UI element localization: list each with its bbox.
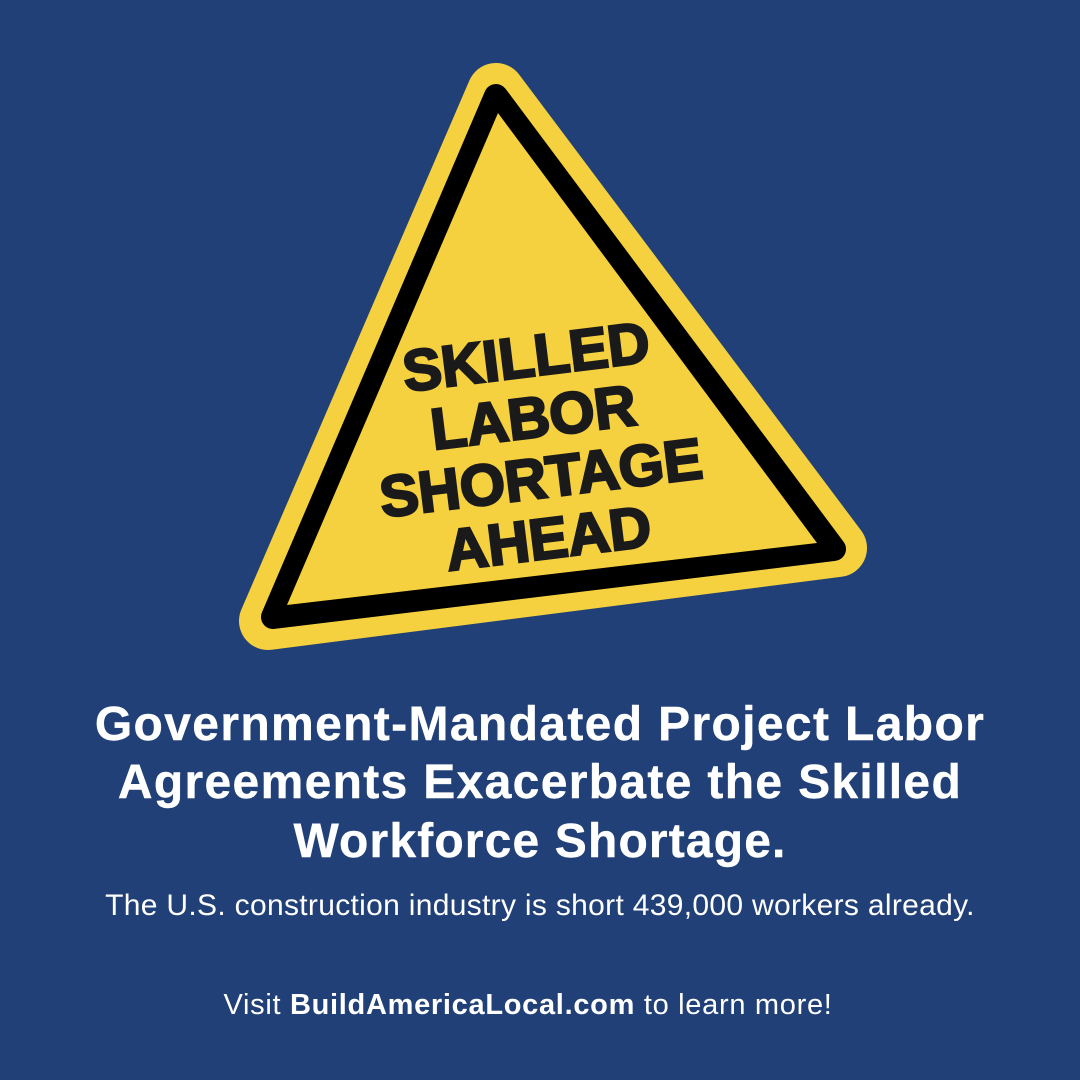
headline: Government-Mandated Project Labor [95, 698, 985, 751]
sign text: LABOR [427, 373, 640, 463]
call to action: Visit BuildAmericaLocal.com to learn more! [223, 989, 833, 1021]
subheading: The U.S. construction industry is short 439,000 workers already. [105, 889, 975, 922]
sign text: SHORTAGE [376, 426, 706, 530]
icon: yellow triangle centre [287, 113, 817, 605]
sign text [361, 305, 713, 591]
sign text: AHEAD [442, 494, 655, 584]
sign text: SKILLED [399, 310, 653, 405]
warning sign [239, 63, 867, 650]
icon: yellow triangle [268, 92, 838, 621]
headline [95, 698, 985, 868]
headline: Agreements Exacerbate the Skilled [118, 756, 962, 809]
headline: Workforce Shortage. [293, 815, 787, 868]
icon: black triangle border [273, 96, 834, 617]
